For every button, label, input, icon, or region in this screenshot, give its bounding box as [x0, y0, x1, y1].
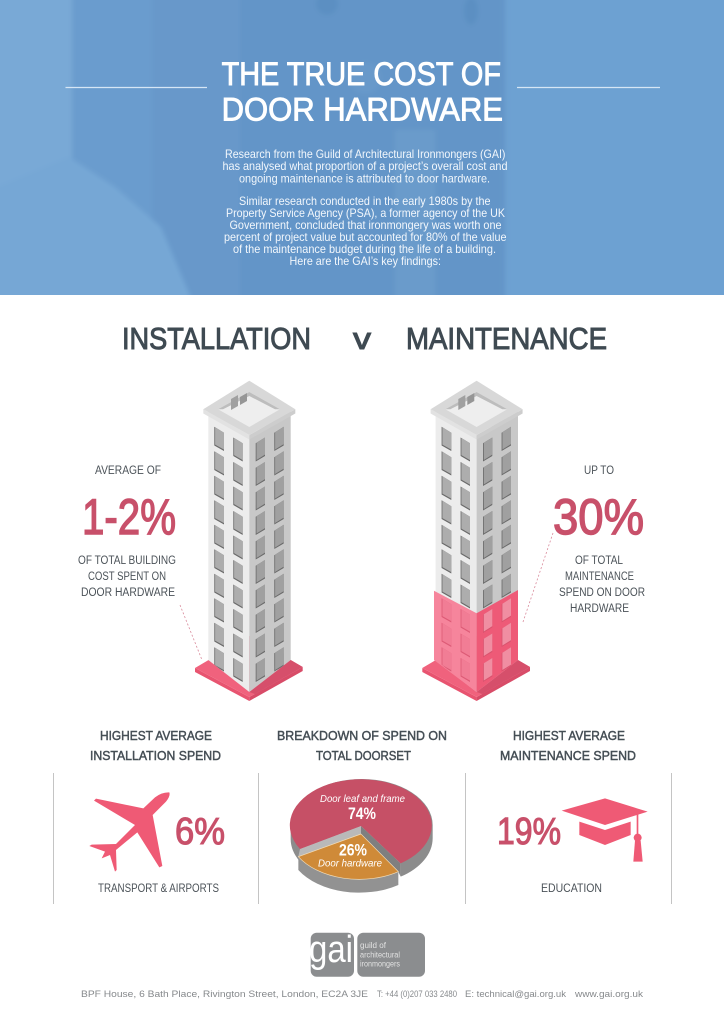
column headings — [90, 729, 636, 763]
pie chart: breakdown of spend on total doorset — [290, 779, 433, 893]
left callout: average of 1-2%: 1-2% — [82, 489, 176, 545]
right callout: up to 30%: OF TOTAL — [575, 555, 624, 567]
logo: guild of architectural ironmongers: gai — [309, 929, 353, 971]
column headings: BREAKDOWN OF SPEND ON — [277, 729, 447, 743]
footer contact details — [81, 989, 643, 1000]
pie chart: breakdown of spend on total doorset: 74% — [348, 804, 376, 823]
right callout: up to 30%: SPEND ON DOOR — [559, 587, 645, 599]
stat: 19% education: 19% — [497, 811, 561, 853]
intro text block: Government, concluded that ironmongery was worth one — [230, 218, 502, 232]
logo: guild of architectural ironmongers: ironmongers — [360, 960, 400, 968]
logo: guild of architectural ironmongers: architectural — [360, 950, 400, 960]
logo: guild of architectural ironmongers — [309, 929, 425, 977]
stat: 6% transport and airports: 6% — [175, 811, 225, 853]
left callout: average of 1-2%: DOOR HARDWARE — [81, 587, 175, 599]
intro text block: ongoing maintenance is attributed to door hardware. — [239, 172, 490, 186]
dashed leader line: right — [523, 533, 553, 622]
illustration: left building with pink base — [195, 381, 303, 701]
heading: installation v maintenance: v — [353, 321, 372, 356]
icon: graduation cap — [562, 798, 648, 862]
footer contact details: www.gai.org.uk — [574, 989, 643, 1000]
stat: 19% education: EDUCATION — [541, 883, 602, 895]
left callout: average of 1-2%: COST SPENT ON — [88, 571, 166, 583]
left callout: average of 1-2%: AVERAGE OF — [95, 465, 161, 477]
stat: 19% education — [497, 811, 602, 895]
footer contact details: BPF House, 6 Bath Place, Rivington Street, London, EC2A 3JE — [81, 989, 368, 1000]
column headings: HIGHEST AVERAGE — [100, 729, 212, 743]
column headings: MAINTENANCE SPEND — [500, 749, 636, 763]
intro text block: of the maintenance budget during the life of a building. — [233, 242, 496, 256]
right callout: up to 30% — [553, 465, 645, 615]
header panel: door photo background in blue — [0, 0, 724, 305]
icon: airplane — [89, 792, 170, 872]
intro text block: percent of project value but accounted for 80% of the value — [224, 230, 507, 244]
intro text block: Here are the GAI’s key findings: — [290, 254, 441, 268]
footer contact details: T: +44 (0)207 033 2480 — [377, 989, 457, 1000]
intro text block: Similar research conducted in the early 1980s by the — [239, 194, 491, 208]
heading: installation v maintenance — [122, 321, 607, 356]
footer contact details: E: technical@gai.org.uk — [465, 989, 566, 1000]
intro text block: Research from the Guild of Architectural Ironmongers (GAI) — [225, 147, 506, 161]
stat: 6% transport and airports — [98, 811, 225, 895]
pie chart: breakdown of spend on total doorset: Door hardware — [318, 859, 382, 870]
heading: installation v maintenance: MAINTENANCE — [406, 321, 607, 356]
column headings: INSTALLATION SPEND — [90, 749, 221, 763]
column headings: TOTAL DOORSET — [316, 749, 411, 763]
logo: guild of architectural ironmongers: guild of — [360, 941, 387, 950]
column headings: HIGHEST AVERAGE — [513, 729, 625, 743]
right callout: up to 30%: MAINTENANCE — [565, 571, 634, 583]
intro text block — [222, 147, 508, 268]
dashed leader line: left — [180, 605, 202, 660]
heading: installation v maintenance: INSTALLATION — [122, 321, 311, 356]
left callout: average of 1-2% — [78, 465, 176, 599]
intro text block: Property Service Agency (PSA), a former agency of the UK — [226, 206, 505, 220]
left callout: average of 1-2%: OF TOTAL BUILDING — [78, 555, 176, 567]
intro text block: has analysed what proportion of a project’s overall cost and — [222, 159, 508, 173]
title: THE TRUE COST OF — [222, 56, 501, 92]
right callout: up to 30%: HARDWARE — [570, 603, 629, 615]
illustration: right building with lower third pink — [422, 381, 530, 701]
stat: 6% transport and airports: TRANSPORT & AIRPORTS — [98, 883, 219, 895]
title — [66, 56, 660, 128]
right callout: up to 30%: 30% — [553, 489, 644, 545]
title: DOOR HARDWARE — [222, 92, 503, 128]
pie chart: breakdown of spend on total doorset: Door leaf and frame — [320, 794, 405, 805]
pie chart: breakdown of spend on total doorset: 26% — [339, 841, 367, 860]
right callout: up to 30%: UP TO — [584, 465, 614, 477]
